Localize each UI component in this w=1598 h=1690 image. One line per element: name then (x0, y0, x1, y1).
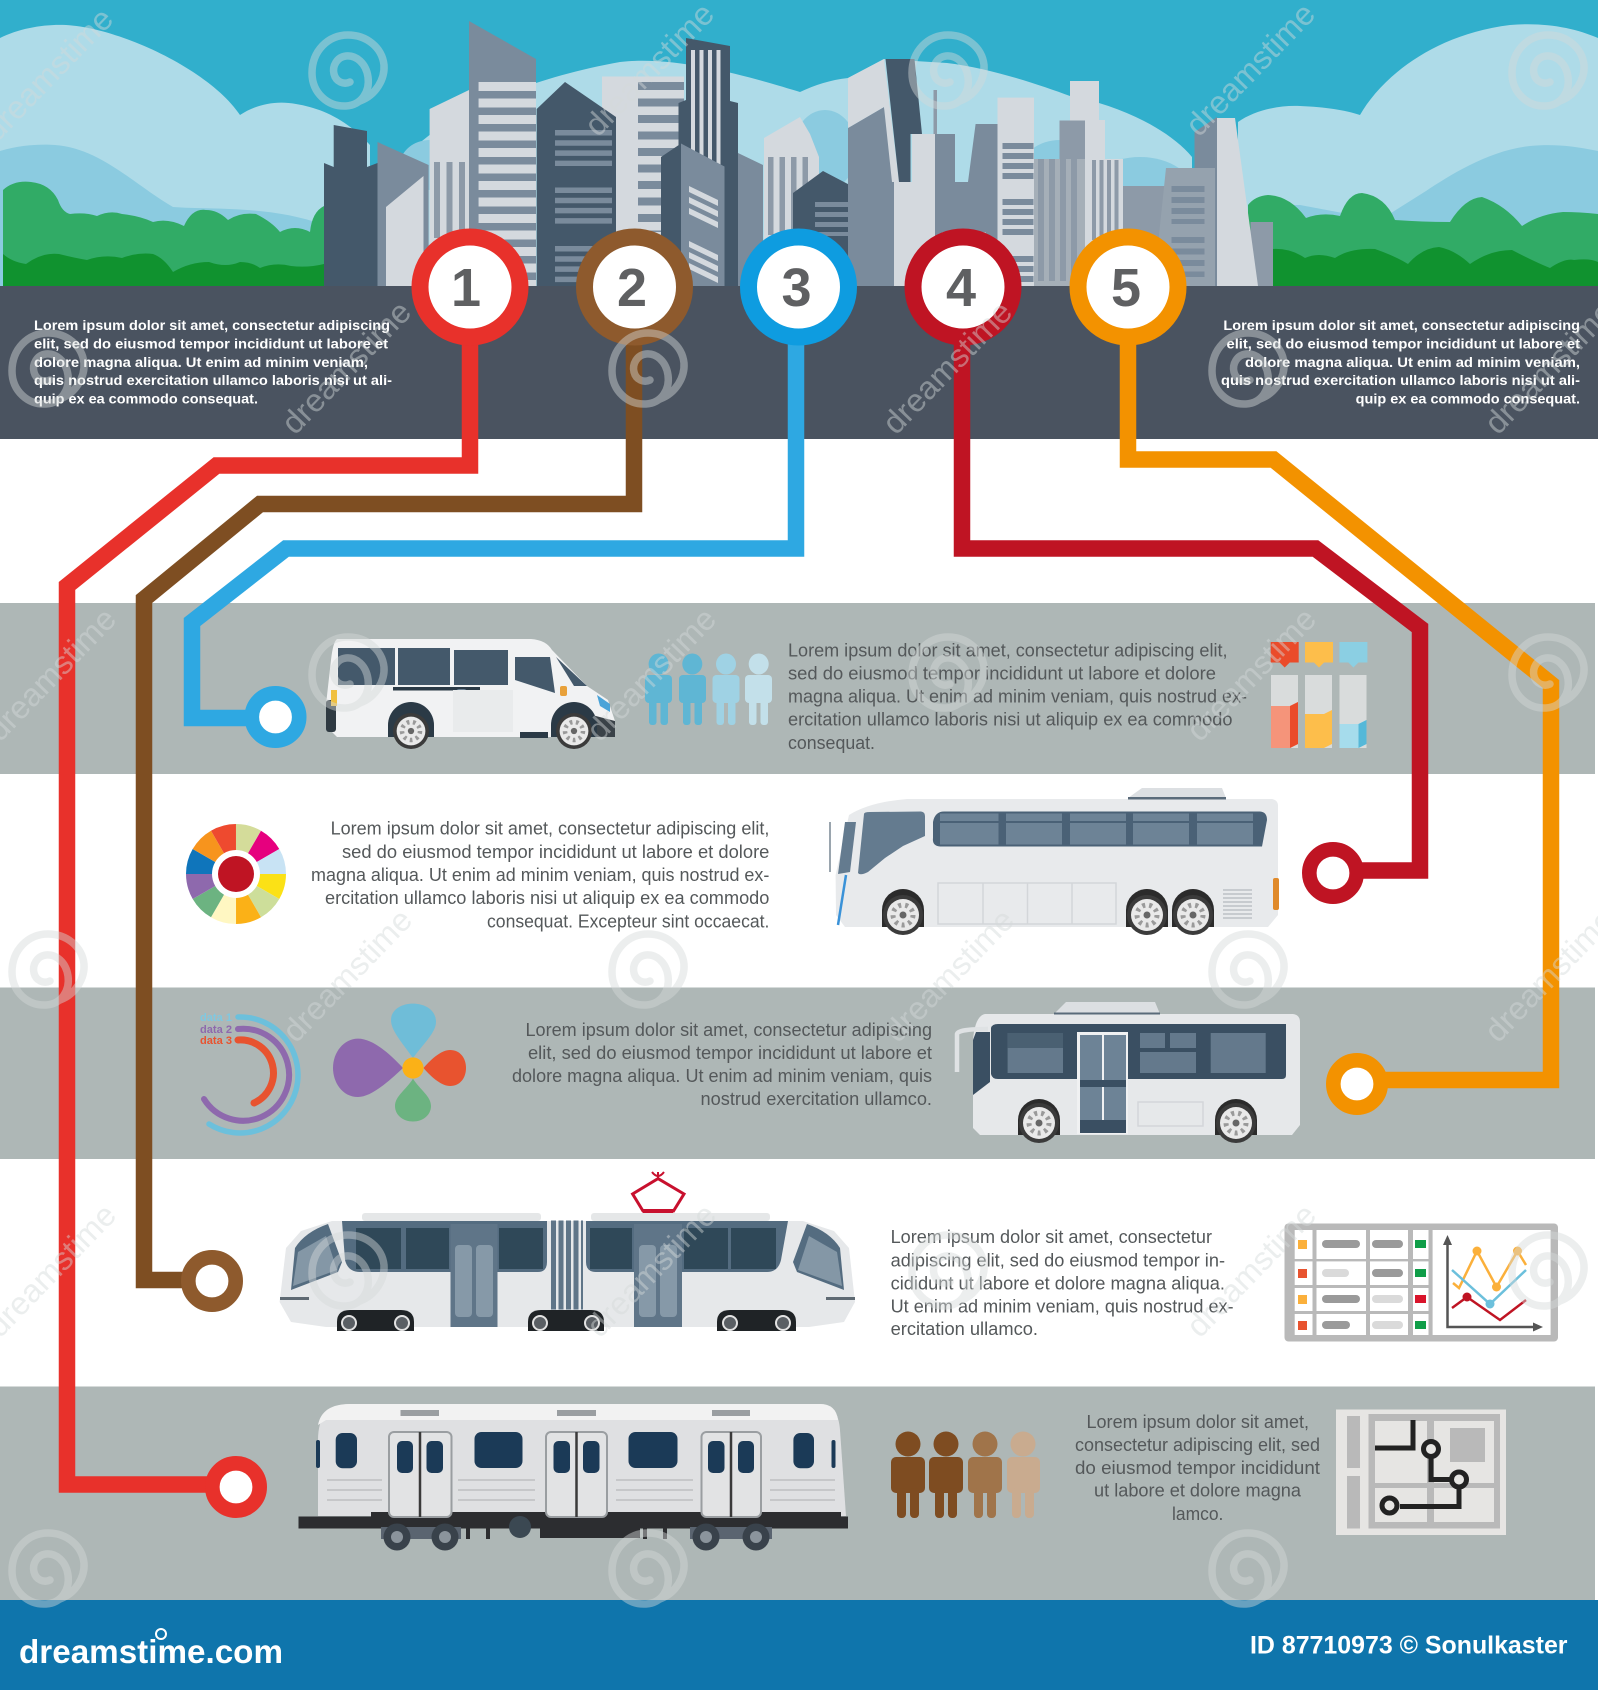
chart: data arcs (200, 1012, 298, 1133)
watermark overlay: dreamstime (274, 294, 418, 441)
end stop red (212, 1463, 260, 1511)
end stop blue (252, 693, 299, 741)
number badge 1 (420, 237, 520, 337)
chart: data arcs: data 2 (200, 1024, 232, 1036)
chart: 3d bars with speech tags (1271, 642, 1367, 748)
route line 2 brown (144, 340, 634, 1305)
clouds (0, 24, 1598, 286)
footer: image id: ID 87710973 © Sonulkaster (1250, 1632, 1568, 1660)
text: row 1: consequat. (788, 733, 875, 753)
vehicle: coach bus (830, 788, 1279, 935)
number badge 3: 3 (781, 258, 812, 318)
icon: logo spiral (156, 1629, 166, 1639)
text: ground band left: elit, sed do eiusmod tempor incididunt ut labore et (34, 336, 388, 352)
watermark overlay: dreamstime (579, 601, 723, 748)
text: ground band right: quis nostrud exercitation ullamco laboris nisi ut ali- (1221, 372, 1580, 388)
skyline buildings (324, 21, 1273, 286)
watermark overlay: dreamstime (275, 902, 419, 1049)
vehicle: tram (280, 1172, 855, 1331)
text: row 5 (1075, 1412, 1320, 1524)
text: row 2: consequat. Excepteur sint occaecat. (487, 911, 769, 931)
footer bar (0, 1600, 1598, 1690)
text: row 1 (788, 640, 1247, 753)
end stop orange (1333, 1060, 1381, 1108)
text: row 4 (891, 1227, 1234, 1339)
number badge 2 (584, 237, 684, 337)
text: ground band left: quip ex ea commodo consequat. (34, 391, 258, 407)
route line 3 blue (192, 340, 796, 741)
panel: city skyline header (0, 0, 1598, 287)
panel: row band 3 (0, 988, 1595, 1159)
number badge 1: 1 (451, 258, 481, 318)
text: row 2: magna aliqua. Ut enim ad minim veniam, quis nostrud ex- (311, 865, 769, 885)
text: row 5: ut labore et dolore magna (1094, 1481, 1302, 1501)
text: row 3: nostrud exercitation ullamco. (700, 1089, 932, 1109)
number badge 3 (748, 237, 848, 337)
text: ground band right: quip ex ea commodo consequat. (1356, 391, 1580, 407)
chart: data arcs: data 1 (200, 1012, 232, 1024)
text: row 3: Lorem ipsum dolor sit amet, consectetur adipiscing (526, 1020, 932, 1040)
number badge 5: 5 (1111, 258, 1141, 318)
vehicle: van (326, 639, 615, 749)
panel: ground band (0, 286, 1598, 439)
watermark overlay: dreamstime (877, 902, 1021, 1049)
panel: row band 1 (0, 603, 1595, 774)
route line 1 red (67, 340, 470, 1511)
text: row 1: Lorem ipsum dolor sit amet, consectetur adipiscing elit, (788, 640, 1228, 660)
route line 5 orange (1128, 340, 1551, 1108)
text: row 3 (512, 1020, 932, 1109)
text: row 1: magna aliqua. Ut enim ad minim veniam, quis nostrud ex- (788, 686, 1247, 706)
text: row 5: do eiusmod tempor incididunt (1075, 1458, 1320, 1478)
text: row 2: sed do eiusmod tempor incididunt ut labore et dolore (342, 842, 769, 862)
text: ground band left: quis nostrud exercitation ullamco laboris nisi ut ali- (34, 372, 392, 388)
text: ground band left (34, 317, 392, 407)
text: ground band right: elit, sed do eiusmod tempor incididunt ut labore et (1226, 336, 1580, 352)
text: row 5: consectetur adipiscing elit, sed (1075, 1435, 1320, 1455)
panel: row band 5 (0, 1386, 1595, 1600)
text: row 5: lamco. (1172, 1504, 1223, 1524)
text: ground band right (1221, 317, 1580, 407)
watermark overlay: dreamstime (875, 294, 1019, 441)
icon: brown people (891, 1432, 1040, 1518)
chart: petal diagram (333, 1004, 466, 1122)
text: row 4: cididunt ut labore et dolore magna aliqua. (891, 1273, 1225, 1293)
chart: colour wheel (185, 823, 287, 925)
vehicle: city bus (957, 1002, 1300, 1143)
text: row 4: ercitation ullamco. (891, 1319, 1038, 1339)
text: row 3: elit, sed do eiusmod tempor incididunt ut labore et (528, 1043, 932, 1063)
watermark overlay: dreamstime (1178, 0, 1322, 143)
watermark overlay: dreamstime (579, 1197, 723, 1344)
text: ground band left: dolore magna aliqua. Ut enim ad minim veniam, (34, 354, 368, 370)
text: ground band left: Lorem ipsum dolor sit amet, consectetur adipiscing (34, 317, 390, 333)
text: ground band right: dolore magna aliqua. Ut enim ad minim veniam, (1245, 354, 1580, 370)
text: row 2: ercitation ullamco laboris nisi ut aliquip ex ea commodo (325, 888, 769, 908)
end stop brown (188, 1257, 236, 1305)
text: row 1: ercitation ullamco laboris nisi ut aliquip ex ea commodo (788, 710, 1232, 730)
text: row 4: Ut enim ad minim veniam, quis nostrud ex- (891, 1296, 1234, 1316)
text: row 4: Lorem ipsum dolor sit amet, consectetur (891, 1227, 1212, 1247)
number badge 4: 4 (946, 258, 976, 318)
icon: blue people (645, 654, 772, 725)
number badge 4 (913, 237, 1013, 337)
icon: route map (1336, 1410, 1506, 1535)
footer: dreamstime logo: dreamstime.com (19, 1633, 283, 1670)
number badge 2: 2 (617, 258, 647, 318)
trees left (3, 182, 324, 286)
watermark overlay: dreamstime (1179, 1197, 1323, 1344)
text: row 2 (311, 819, 769, 931)
watermark overlay: dreamstime (577, 0, 721, 143)
text: ground band right: Lorem ipsum dolor sit amet, consectetur adipiscing (1223, 317, 1580, 333)
text: row 4: adipiscing elit, sed do eiusmod tempor in- (891, 1250, 1225, 1270)
text: row 3: dolore magna aliqua. Ut enim ad minim veniam, quis (512, 1066, 932, 1086)
sky (0, 0, 1598, 287)
number badge 5 (1078, 237, 1178, 337)
trees right (1248, 193, 1598, 286)
text: row 1: sed do eiusmod tempor incididunt ut labore et dolore (788, 664, 1216, 684)
vehicle: metro train (298, 1404, 848, 1550)
chart: data table and line graph (1284, 1224, 1558, 1342)
text: row 2: Lorem ipsum dolor sit amet, consectetur adipiscing elit, (331, 819, 769, 839)
watermark overlay: dreamstime (1179, 601, 1323, 748)
route line 4 dark red (962, 340, 1420, 897)
text: row 5: Lorem ipsum dolor sit amet, (1086, 1412, 1309, 1432)
end stop dark red (1309, 849, 1357, 897)
chart: data arcs: data 3 (200, 1035, 232, 1047)
